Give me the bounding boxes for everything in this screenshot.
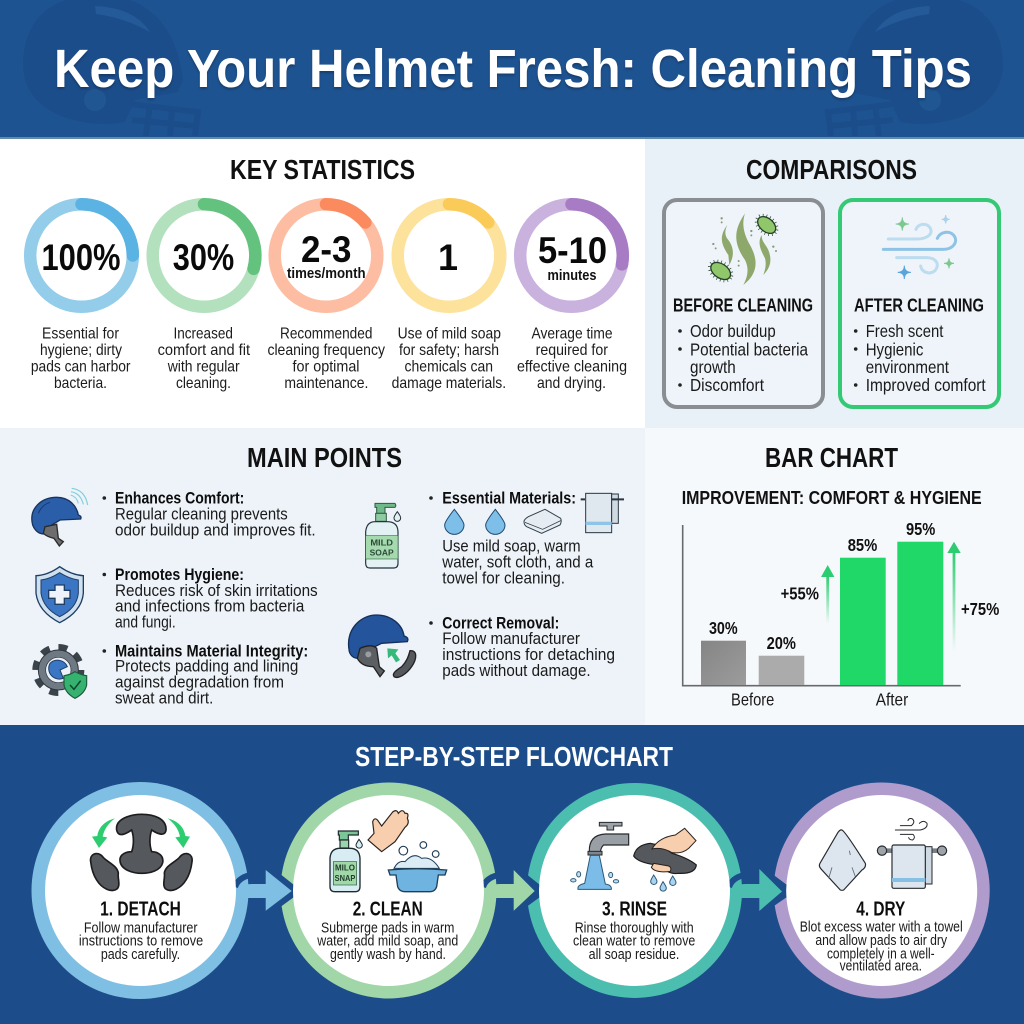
point: correct removal [349, 613, 615, 680]
stat: 30%: 30% [173, 237, 234, 278]
stat: 30%: comfort and fit [158, 342, 251, 359]
list: before cleaning points: Potential bacteria [690, 340, 808, 360]
panel: main points [0, 428, 645, 725]
heading: step-by-step flowchart: STEP-BY-STEP FLOWCHART [355, 741, 673, 772]
stat: 1 soap: Use of mild soap [398, 325, 501, 342]
bar: after 85% [840, 535, 886, 685]
panel: step-by-step flowchart [0, 725, 1024, 1024]
step 4: dry: ventilated area. [840, 959, 922, 975]
label: before cleaning: BEFORE CLEANING [673, 295, 813, 316]
arrow: +55%: +55% [781, 583, 819, 603]
stat: 5-10 minutes: Average time [532, 325, 613, 342]
stat: 30% [153, 204, 255, 392]
step 2: clean [272, 782, 498, 998]
bar: before 20% [759, 633, 804, 685]
point: promotes hygiene [36, 565, 318, 631]
step 4: dry: and allow pads to air dry [815, 933, 948, 949]
bar: before 30%: 30% [709, 618, 738, 638]
stat: 30%: with regular [167, 359, 240, 376]
point: essential materials: towel for cleaning. [442, 569, 565, 588]
stat: 1 soap: damage materials. [392, 375, 506, 392]
point: maintains material integrity: Protects padding and lining [115, 657, 298, 676]
stat: 2-3 times per month: times/month [287, 266, 366, 282]
icon: cloth, towel rack and wind [819, 819, 947, 890]
step 3: rinse: Rinse thoroughly with [575, 919, 694, 936]
point: enhances comfort [32, 488, 316, 546]
step 2: clean: water, add mild soap, and [316, 933, 458, 950]
stat: 100%: 100% [42, 237, 120, 278]
stat: 1 soap: for safety; harsh [399, 342, 499, 359]
stat: 100%: pads can harbor [31, 359, 131, 376]
heading: main points: MAIN POINTS [247, 442, 402, 473]
axis label: before: Before [731, 690, 774, 710]
icon: soap, hand and basin: SNAP [335, 873, 356, 883]
point: correct removal: pads without damage. [442, 661, 591, 680]
step 2: clean: gently wash by hand. [330, 946, 446, 963]
point: enhances comfort: Regular cleaning prevents [115, 504, 288, 523]
icon: mild soap bottle: MILD [370, 538, 393, 547]
stat: 2-3 times per month: Recommended [280, 325, 372, 342]
point: promotes hygiene: and fungi. [115, 612, 176, 631]
list: before cleaning points: Discomfort [690, 375, 764, 395]
point: maintains material integrity: sweat and dirt. [115, 688, 213, 707]
arrow: step 3 to step 4 [730, 869, 782, 911]
list: before cleaning points: growth [690, 357, 736, 377]
icon: helmet with pad and green arrow [349, 615, 416, 677]
panel: comparisons [645, 139, 1024, 428]
icon: shield with cross [36, 567, 83, 623]
icon: faint helmet right [828, 0, 1003, 136]
stat: 2-3 times per month: for optimal [292, 359, 360, 376]
stat: 2-3 times per month: cleaning frequency [267, 342, 385, 359]
point: promotes hygiene: Reduces risk of skin irritations [115, 581, 318, 600]
list: after cleaning points: Improved comfort [866, 375, 986, 395]
card: before cleaning [664, 200, 823, 407]
point: maintains material integrity: against degradation from [115, 672, 284, 691]
step 3: rinse [518, 783, 744, 998]
point: correct removal: instructions for detaching [442, 645, 615, 664]
icon: pads with green arrows [91, 814, 192, 890]
bar: before 30% [701, 618, 746, 685]
icon: helmet with signal arcs [32, 488, 88, 546]
stat: 1 soap: chemicals can [405, 359, 493, 376]
step 1: detach: 1. DETACH [100, 899, 181, 921]
step 3: rinse: 3. RINSE [602, 899, 667, 921]
point: maintains material integrity [36, 642, 308, 707]
heading: key statistics: KEY STATISTICS [230, 154, 415, 185]
point: enhances comfort: odor buildup and improves fit. [115, 520, 316, 539]
icon: odor waves and bacteria [706, 211, 781, 285]
arrow: +55% [781, 565, 834, 624]
point: promotes hygiene: and infections from bacteria [115, 597, 305, 616]
bar chart [683, 519, 1000, 710]
icon: water drops, cloth and towel [445, 493, 624, 534]
icon: faint helmet left [23, 0, 198, 136]
axis label: after: After [876, 690, 908, 710]
stat: 100%: Essential for [42, 325, 120, 342]
point: maintains material integrity: Maintains Material Integrity: [115, 642, 308, 661]
point: enhances comfort: Enhances Comfort: [115, 488, 244, 507]
stat: 5-10 minutes: and drying. [537, 375, 606, 392]
panel: bar chart [645, 428, 1024, 725]
icon: mild soap bottle: SOAP [370, 548, 394, 557]
icon: gear with wrench and shield [36, 648, 87, 698]
icon: faucet, water and hand washing pad [571, 822, 696, 891]
arrow: +75% [947, 542, 1000, 652]
arrow: step 2 to step 3 [484, 870, 535, 911]
list: after cleaning points: Hygienic [866, 340, 924, 360]
step 1: detach: pads carefully. [101, 946, 180, 963]
list: before cleaning points: Odor buildup [690, 321, 776, 341]
step 4: dry: 4. DRY [856, 899, 906, 921]
panel: key statistics [0, 139, 645, 428]
bar: after 85%: 85% [848, 535, 878, 555]
chart subtitle: IMPROVEMENT: COMFORT & HYGIENE [682, 488, 982, 508]
list: after cleaning points: environment [866, 357, 949, 377]
icon: mild soap bottle [366, 503, 401, 568]
stat: 30%: Increased [173, 325, 233, 342]
step 4: dry [764, 782, 990, 998]
stat: 5-10 minutes: required for [536, 342, 609, 359]
point: essential materials: Essential Materials: [442, 488, 576, 507]
step 1: detach: Follow manufacturer [84, 919, 198, 936]
step 4: dry: Blot excess water with a towel [800, 920, 963, 936]
point: essential materials: Use mild soap, warm [442, 537, 581, 556]
icon: soap, hand and basin: MILO [335, 863, 355, 873]
icon: soap, hand and basin [330, 811, 447, 892]
list: after cleaning points: Fresh scent [866, 321, 944, 341]
step 3: rinse: clean water to remove [573, 933, 695, 950]
stat: 1 soap [392, 204, 506, 392]
header banner [0, 0, 1024, 139]
bar: before 20%: 20% [767, 633, 796, 653]
label: after cleaning: AFTER CLEANING [854, 295, 984, 316]
list: after cleaning points [854, 321, 986, 395]
stat: 5-10 minutes: minutes [548, 268, 596, 284]
point: correct removal: Follow manufacturer [442, 629, 580, 648]
stat: 5-10 minutes: effective cleaning [517, 359, 627, 376]
stat: 2-3 times per month: maintenance. [284, 375, 368, 392]
icon: fresh wind and sparkles [883, 215, 956, 279]
stat: 30%: cleaning. [176, 375, 231, 392]
step 1: detach: instructions to remove [79, 933, 203, 950]
bar: after 95% [897, 519, 943, 685]
arrow: +75%: +75% [961, 599, 1000, 619]
card: after cleaning [840, 200, 999, 407]
bar: after 95%: 95% [906, 519, 936, 539]
step 2: clean: Submerge pads in warm [321, 919, 454, 936]
step 3: rinse: all soap residue. [589, 946, 679, 963]
stat: 100% [30, 204, 133, 392]
point: essential materials: water, soft cloth, and a [441, 553, 594, 572]
point: correct removal: Correct Removal: [442, 613, 559, 632]
arrow: step 1 to step 2 [236, 870, 292, 911]
stat: 5-10 minutes: 5-10 [538, 230, 607, 271]
step 4: dry: completely in a well- [827, 946, 935, 962]
stat: 2-3 times per month [267, 204, 385, 392]
stat: 2-3 times per month: 2-3 [301, 229, 351, 270]
stat: 1 soap: 1 [438, 237, 458, 278]
stat: 100%: hygiene; dirty [40, 342, 122, 359]
step 1: detach [32, 782, 250, 999]
point: essential materials [366, 488, 624, 588]
stat: 5-10 minutes [517, 204, 627, 392]
stat: 100%: bacteria. [54, 375, 107, 392]
heading: comparisons: COMPARISONS [746, 154, 917, 185]
list: before cleaning points [678, 321, 808, 395]
point: promotes hygiene: Promotes Hygiene: [115, 565, 244, 584]
heading: bar chart: BAR CHART [765, 442, 898, 473]
step 2: clean: 2. CLEAN [353, 899, 423, 921]
